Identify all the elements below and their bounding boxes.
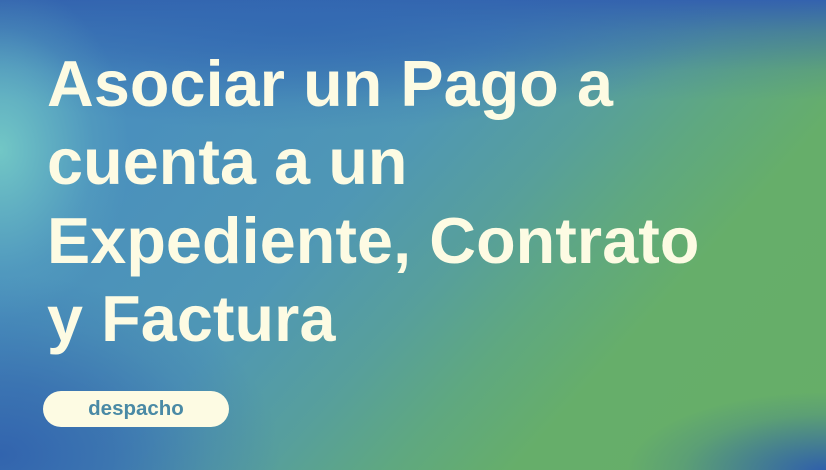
title: cuenta a un [47,125,408,198]
title: y Factura [47,282,336,355]
title: Asociar un Pago a [47,47,613,120]
title: Expediente, Contrato [47,204,700,277]
category badge: despacho: despacho [88,397,184,420]
title [47,47,700,355]
category badge: despacho [43,391,229,427]
